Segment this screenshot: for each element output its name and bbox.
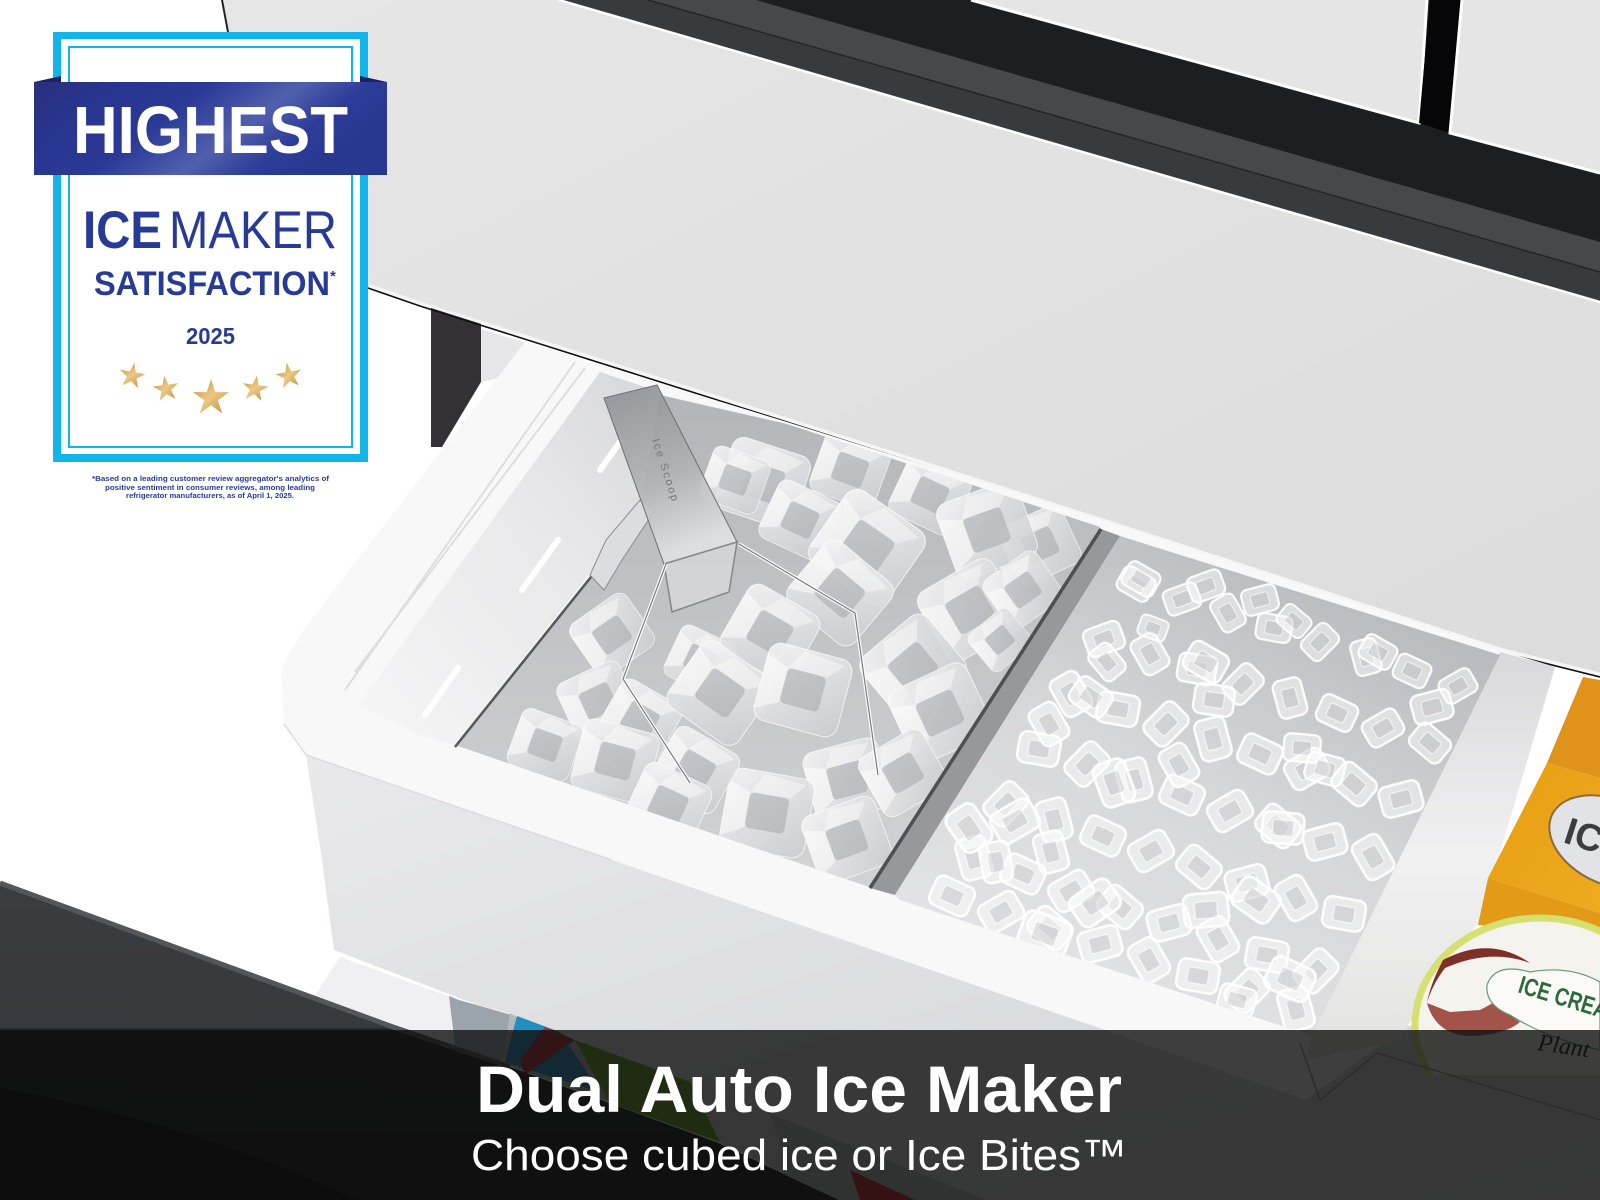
five gold stars <box>117 360 304 413</box>
footnote: *Based on a leading customer review aggregator's analytics of <box>92 474 329 483</box>
cubed ice well <box>455 395 1100 888</box>
freezer item strip below the drawer <box>314 957 987 1200</box>
fridge dark side post <box>431 300 481 447</box>
orange ice cream box <box>1478 677 1600 935</box>
caption subtitle: Choose cubed ice or Ice Bites™ <box>471 1131 1127 1180</box>
icemaker heading: MAKER <box>169 201 337 260</box>
drawer front wall <box>306 755 1600 1200</box>
ice scoop <box>604 385 878 783</box>
large drawer front panel <box>222 0 1600 677</box>
drawer rim and right side band <box>281 342 1555 1100</box>
satisfaction heading: SATISFACTION <box>94 265 330 303</box>
back wall behind drawer <box>481 329 787 500</box>
ice cream tub lid <box>1412 914 1600 1075</box>
badge frame <box>53 32 368 462</box>
ice scoop: Ice Scoop <box>649 437 681 505</box>
icemaker heading <box>83 201 337 260</box>
upper drawer fronts and dark band <box>559 0 1600 302</box>
under-bar drawer handle lines <box>1300 1043 1600 1120</box>
footnote <box>92 474 329 500</box>
cubed ice <box>504 428 1085 887</box>
ice bites well <box>895 536 1500 1036</box>
asterisk: * <box>330 268 336 285</box>
dark caption bar <box>0 1030 1600 1200</box>
caption title: Dual Auto Ice Maker <box>476 1052 1122 1126</box>
ribbon banner <box>34 76 387 175</box>
bin divider <box>870 529 1120 895</box>
clear bin left wall <box>345 362 660 745</box>
icemaker heading: ICE <box>83 201 162 260</box>
award badge <box>34 32 387 500</box>
year: 2025 <box>186 323 235 349</box>
ice bites <box>927 559 1480 1033</box>
footnote: positive sentiment in consumer reviews, among leading <box>105 483 315 492</box>
footnote: refrigerator manufacturers, as of April 1, 2025. <box>126 491 294 500</box>
ice cream tub lid: Plant <box>1535 1030 1593 1063</box>
banner word: HIGHEST <box>73 93 348 168</box>
bottom dark freezer door <box>0 883 839 1200</box>
